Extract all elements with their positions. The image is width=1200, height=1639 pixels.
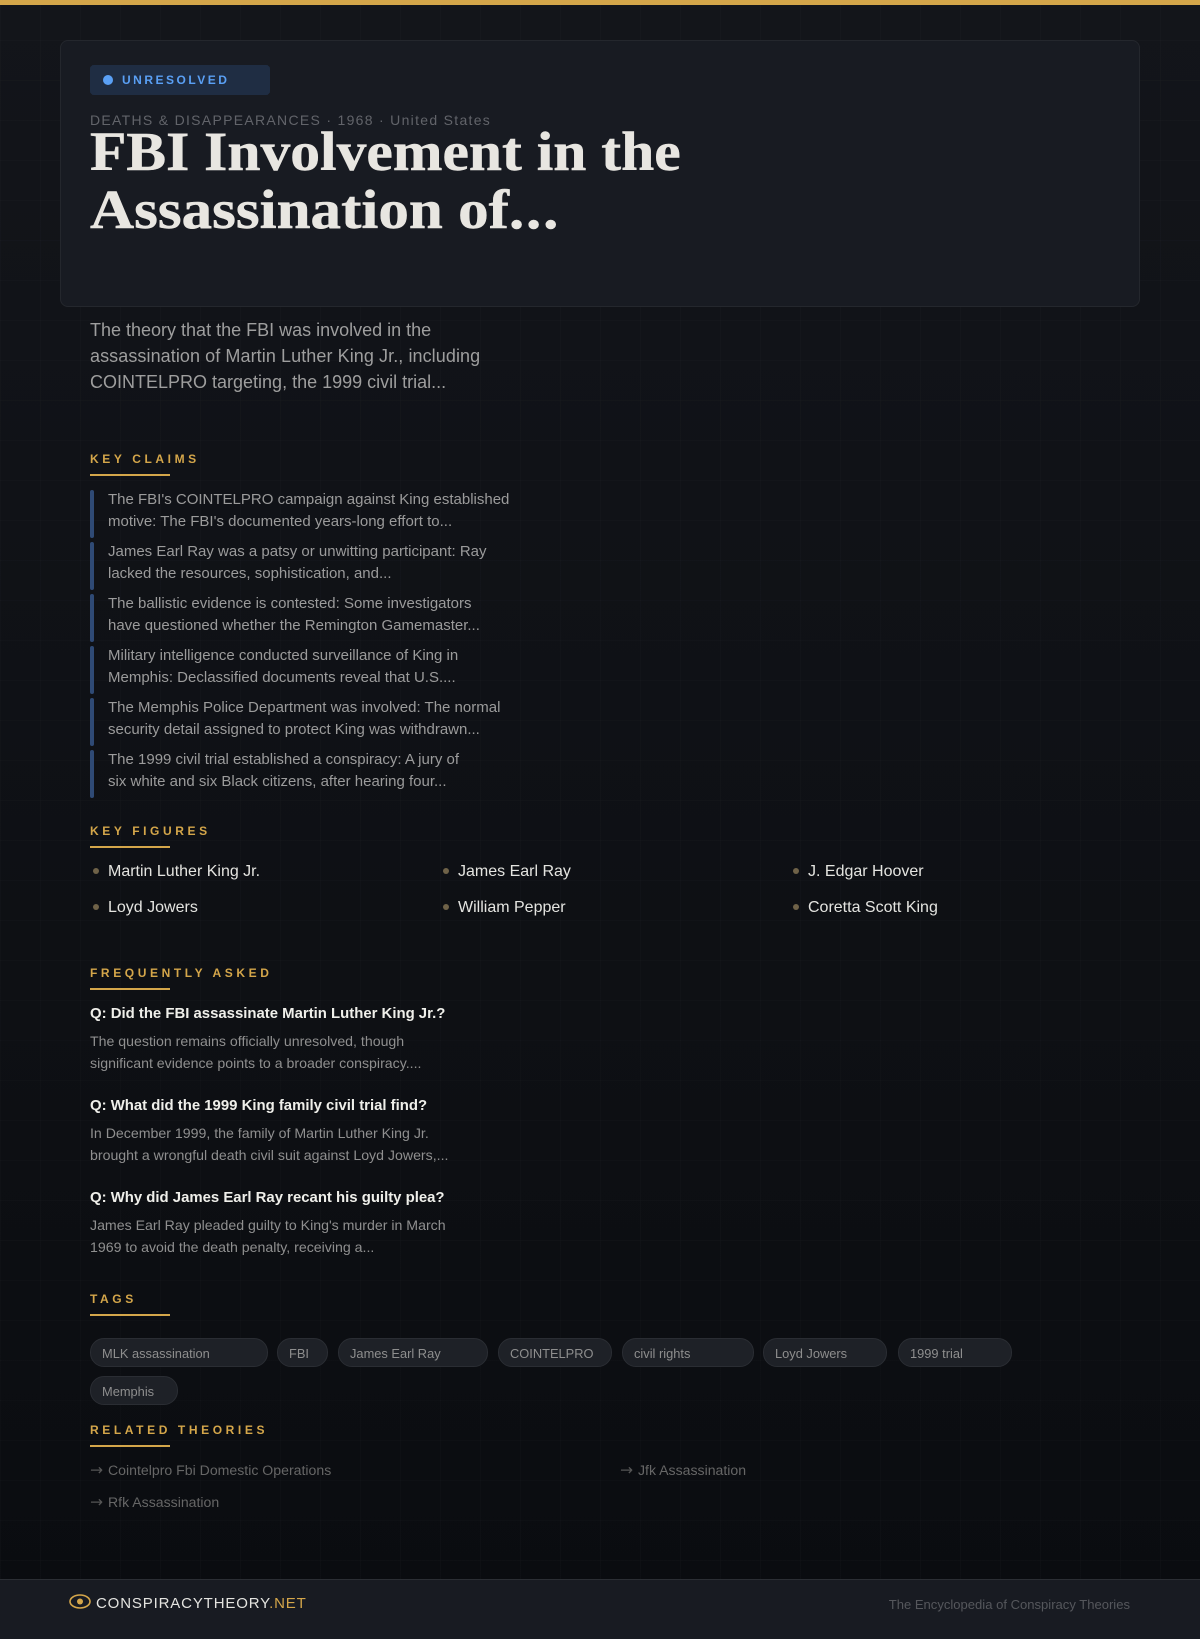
panel: tags: [90, 1338, 1012, 1405]
claim 4: Memphis: Declassified documents reveal that U.S....: [108, 669, 456, 686]
tag: [763, 1338, 887, 1367]
category and date line: DEATHS & DISAPPEARANCES · 1968 · United States: [90, 112, 491, 128]
related link: Cointelpro Fbi Domestic Operations: [108, 1462, 331, 1478]
tag: [90, 1338, 268, 1367]
panel: key figures list: [93, 863, 938, 916]
panel: claims list: [90, 490, 509, 798]
figure: Martin Luther King Jr.: Martin Luther King Jr.: [108, 863, 260, 880]
tag: James Earl Ray: [350, 1346, 441, 1361]
figure: J. Edgar Hoover: J. Edgar Hoover: [808, 863, 924, 880]
heading: tags: TAGS: [90, 1292, 137, 1306]
tag: civil rights: [634, 1346, 690, 1361]
answer 3: [90, 1217, 446, 1255]
heading: key claims: KEY CLAIMS: [90, 452, 200, 466]
claim 6: [90, 750, 460, 798]
claim 4: [90, 646, 458, 694]
badge label: UNRESOLVED: [122, 73, 229, 87]
claim 1: [90, 490, 509, 538]
figure: William Pepper: William Pepper: [458, 899, 566, 916]
icon: status dot: [103, 75, 113, 85]
related link: Rfk Assassination: [108, 1494, 219, 1510]
claim 6: The 1999 civil trial established a conspiracy: A jury of: [108, 751, 459, 768]
heading: related theories: RELATED THEORIES: [90, 1423, 268, 1437]
question 1: Q: Did the FBI assassinate Martin Luther King Jr.?: [90, 1005, 445, 1022]
related link: →: [620, 1461, 633, 1479]
question 2: Q: What did the 1999 King family civil trial find?: [90, 1097, 427, 1114]
related link: →: [90, 1493, 103, 1511]
summary text: COINTELPRO targeting, the 1999 civil trial...: [90, 372, 446, 392]
footer: [0, 1579, 1200, 1639]
figure: Coretta Scott King: Coretta Scott King: [808, 899, 938, 916]
figure: James Earl Ray: James Earl Ray: [458, 863, 571, 880]
tag: Loyd Jowers: [775, 1346, 847, 1361]
answer 2: [90, 1125, 448, 1163]
tag: 1999 trial: [910, 1346, 963, 1361]
claim 6: six white and six Black citizens, after hearing four...: [108, 773, 446, 790]
tag: MLK assassination: [102, 1346, 210, 1361]
tag: [622, 1338, 754, 1367]
claim 3: The ballistic evidence is contested: Some investigators: [108, 595, 472, 612]
answer 3: 1969 to avoid the death penalty, receiving a...: [90, 1239, 374, 1255]
claim 5: security detail assigned to protect King was withdrawn...: [108, 721, 480, 738]
tag: [498, 1338, 612, 1367]
tag: [338, 1338, 488, 1367]
related link: Jfk Assassination: [638, 1462, 746, 1478]
answer 1: [90, 1033, 421, 1071]
tag: FBI: [289, 1346, 309, 1361]
answer 3: James Earl Ray pleaded guilty to King's murder in March: [90, 1217, 446, 1233]
tag: Memphis: [102, 1384, 154, 1399]
claim 5: [90, 698, 500, 746]
claim 2: lacked the resources, sophistication, and...: [108, 565, 392, 582]
title: Assassination of...: [90, 179, 560, 240]
title: FBI Involvement in the: [90, 121, 681, 182]
tagline: The Encyclopedia of Conspiracy Theories: [889, 1597, 1130, 1612]
claim 2: [90, 542, 486, 590]
tag: COINTELPRO: [510, 1346, 594, 1361]
summary text: [90, 320, 480, 392]
claim 1: motive: The FBI's documented years-long effort to...: [108, 513, 452, 530]
claim 3: [90, 594, 480, 642]
claim 1: The FBI's COINTELPRO campaign against King established: [108, 491, 509, 508]
answer 2: In December 1999, the family of Martin Luther King Jr.: [90, 1125, 429, 1141]
figure: Loyd Jowers: Loyd Jowers: [108, 899, 198, 916]
heading: frequently asked: FREQUENTLY ASKED: [90, 966, 273, 980]
claim 5: The Memphis Police Department was involved: The normal: [108, 699, 500, 716]
claim 4: Military intelligence conducted surveillance of King in: [108, 647, 458, 664]
icon: eye logo: [69, 1594, 91, 1609]
question 3: Q: Why did James Earl Ray recant his guilty plea?: [90, 1189, 445, 1206]
heading: key figures: KEY FIGURES: [90, 824, 211, 838]
claim 2: James Earl Ray was a patsy or unwitting participant: Ray: [108, 543, 486, 560]
summary text: The theory that the FBI was involved in the: [90, 320, 431, 340]
badge: unresolved: [90, 65, 270, 95]
tag: [277, 1338, 328, 1367]
summary text: assassination of Martin Luther King Jr., including: [90, 346, 480, 366]
title: [90, 121, 681, 240]
logo text: CONSPIRACYTHEORY.NET: [96, 1595, 307, 1612]
claim 3: have questioned whether the Remington Gamemaster...: [108, 617, 480, 634]
answer 1: significant evidence points to a broader conspiracy....: [90, 1055, 421, 1071]
related link: →: [90, 1461, 103, 1479]
tag: [90, 1376, 178, 1405]
panel: header: [60, 40, 1140, 307]
answer 1: The question remains officially unresolved, though: [90, 1033, 404, 1049]
tag: [898, 1338, 1012, 1367]
answer 2: brought a wrongful death civil suit against Loyd Jowers,...: [90, 1147, 448, 1163]
